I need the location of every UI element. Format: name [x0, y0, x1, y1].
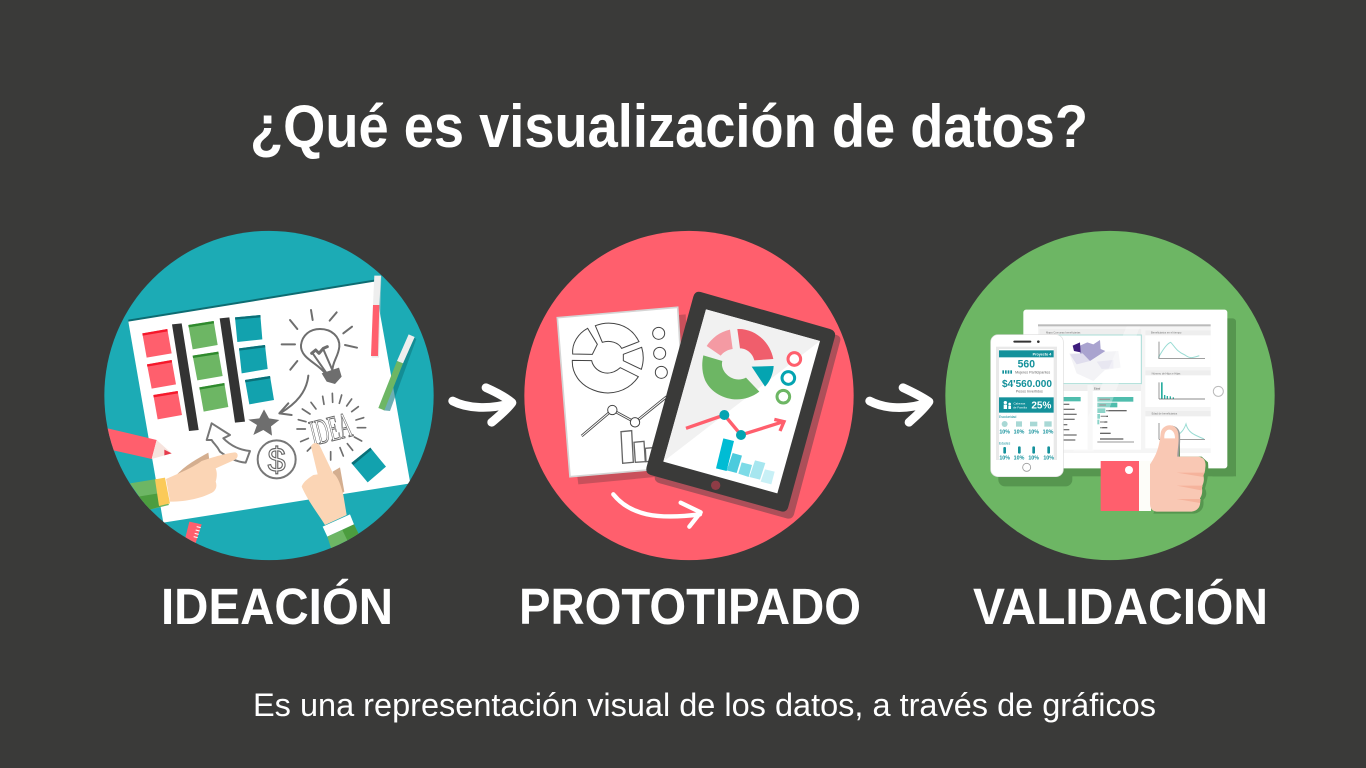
icon: idea sketch [297, 393, 366, 460]
white diagonal glare [1073, 326, 1140, 452]
phone home button [1023, 463, 1031, 471]
banner 25%: 25% [1031, 400, 1051, 411]
white cuff [1139, 461, 1151, 511]
panel: bars right [1093, 385, 1141, 450]
panel: area chart 3 [1145, 411, 1211, 448]
label: prototipado: PROTOTIPADO [519, 578, 861, 635]
edades stats [999, 441, 1054, 462]
metric 560: Mujeres Participantes [1015, 370, 1050, 374]
smartphone [991, 335, 1063, 477]
finger creases [1177, 473, 1204, 503]
map panel: Mapa Comunas beneficiarias [1046, 331, 1081, 335]
label: validación: VALIDACIÓN [973, 578, 1268, 635]
icon: red pencil [102, 428, 172, 459]
black bars [172, 317, 245, 431]
metric money: $4'560.000 [1002, 379, 1052, 390]
phone header: Proyecto 4 [1033, 352, 1052, 356]
icon: bulb base [322, 368, 342, 384]
panel: bars right: Edad [1094, 387, 1101, 391]
escolaridad stats: Escolaridad [999, 415, 1017, 419]
circle background [524, 231, 854, 560]
tablet screen [663, 309, 820, 493]
phone screen [996, 347, 1057, 460]
desktop monitor [1023, 310, 1227, 468]
icon: dollar coin: $ [268, 442, 286, 480]
banner 25%: de Familia [1013, 405, 1027, 409]
hand pointing up [302, 443, 360, 550]
edades stats: 10% [1043, 456, 1054, 462]
icon: marker red [371, 276, 381, 358]
sketched bar chart [621, 431, 657, 463]
monitor home button [1213, 386, 1223, 396]
circle background [104, 231, 434, 560]
teal sticky notes [235, 315, 274, 404]
illustration: paper and drawings [102, 276, 416, 550]
panel: ideación [102, 231, 434, 560]
tablet home button [711, 481, 720, 490]
device shadows [998, 318, 1236, 486]
sketched legend circles [653, 327, 667, 378]
banner 25% [999, 397, 1054, 413]
green sticky notes [188, 321, 228, 412]
edades stats: Edades [999, 441, 1011, 445]
red sleeve [1101, 461, 1139, 511]
icon: light bulb [279, 310, 357, 415]
paper shadow [577, 314, 693, 484]
thumbnail [1164, 430, 1175, 438]
paper sheet [128, 280, 410, 523]
sketched donut chart [572, 323, 643, 393]
map panel [1039, 329, 1141, 384]
donut chart [702, 329, 774, 399]
panel: area chart 1: Beneficiarios en el tiempo [1151, 331, 1182, 335]
panel: validación [945, 231, 1275, 560]
label: ideación: IDEACIÓN [161, 578, 393, 635]
panel: area chart 3: Edad de beneficiarios [1152, 411, 1178, 415]
escolaridad stats: 10% [1028, 430, 1039, 436]
sketch paper [557, 307, 687, 477]
tablet body [646, 292, 835, 512]
metric money: Pesos Invertidos [1016, 389, 1043, 393]
tablet shadow [654, 334, 840, 519]
thumb shadow on screen [1163, 426, 1180, 458]
icon: marker green [378, 334, 416, 411]
icon: idea sketch: IDEA [306, 405, 356, 453]
phone speaker [1013, 340, 1040, 343]
hand [1150, 425, 1206, 512]
edades stats: 10% [1014, 456, 1025, 462]
metric 560: 560 [1018, 359, 1035, 371]
red sticky notes [142, 329, 182, 419]
circle background [945, 231, 1275, 560]
panel: bar chart 2 [1145, 370, 1211, 407]
arrow: prototipado to validación [870, 388, 929, 422]
edades stats: 10% [999, 456, 1010, 462]
escolaridad stats [999, 415, 1054, 436]
icon: star [248, 409, 279, 436]
sketched line chart [582, 397, 667, 436]
panel: area chart 1 [1145, 330, 1211, 367]
phone body [991, 335, 1063, 477]
hand pointing right [130, 452, 238, 510]
line chart with arrow [686, 410, 784, 440]
legend rings [777, 353, 801, 403]
bar chart [716, 438, 775, 484]
arrow: ideación to prototipado [453, 388, 512, 422]
dashboard frame [1038, 324, 1211, 453]
banner 25%: Cabezas [1013, 401, 1026, 405]
thumbs-up hand [1101, 425, 1208, 514]
panel: bar chart 2: Número de Hijos e Hijas [1152, 371, 1181, 375]
illustration: devices and thumb [991, 310, 1236, 514]
teal diamond note [351, 448, 386, 482]
panel: bars left [1039, 385, 1088, 450]
curved white arrow [613, 494, 701, 527]
escolaridad stats: 10% [1014, 430, 1025, 436]
hand shadow [1153, 433, 1208, 514]
icon: dollar coin [258, 440, 296, 480]
phone header [999, 350, 1054, 357]
icon: hand-drawn arrow [207, 423, 250, 463]
escolaridad stats: 10% [999, 430, 1010, 436]
illustration: sketch and tablet [557, 292, 840, 527]
title: ¿Qué es visualización de datos? [250, 93, 1088, 160]
metric 560 [1002, 359, 1050, 374]
subtitle: Es una representación visual de los datos, a través de gráficos [253, 687, 1156, 723]
edades stats: 10% [1028, 456, 1039, 462]
icon: ruler [184, 522, 202, 545]
escolaridad stats: 10% [1043, 430, 1054, 436]
panel: prototipado [524, 231, 854, 560]
